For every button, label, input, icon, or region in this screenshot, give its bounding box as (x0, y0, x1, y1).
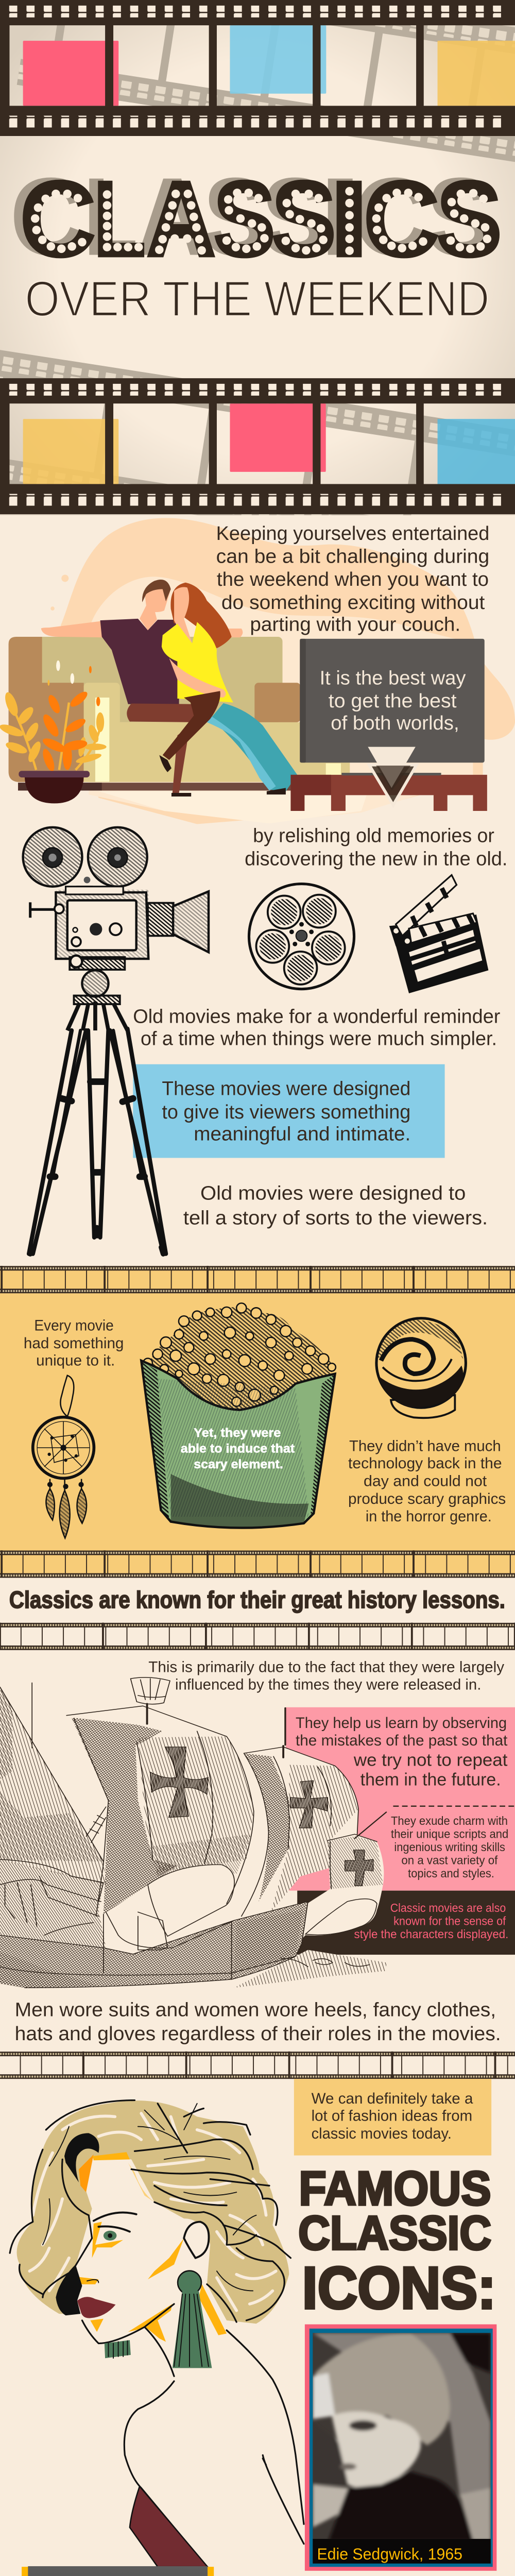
title: CLASSICS: A (146, 159, 216, 279)
text: style (354, 1901, 508, 1941)
hair cream streaks (29, 2113, 276, 2311)
top film strip (0, 0, 515, 136)
panel: famous icons (10, 2079, 496, 2571)
text: learn: the mistakes of the past so that (296, 1732, 507, 1749)
face line (82, 2304, 304, 2567)
text: learn: we try not to repeat (353, 1750, 508, 1770)
text: TV caption: of both worlds, (331, 712, 459, 734)
text: every movie: unique to it. (36, 1352, 115, 1369)
title shadow: A (138, 157, 207, 277)
man and woman (41, 580, 297, 796)
film strip divider (0, 1551, 515, 1578)
text: technology: technology back in the (348, 1455, 502, 1472)
title: CLASSICS: I (329, 159, 370, 279)
text: designed: to give its viewers something (162, 1101, 410, 1123)
tripod legs (29, 1029, 166, 1254)
main sail light hatching (138, 1736, 254, 1872)
text: every movie: Every movie (34, 1317, 114, 1334)
left sail hatching (0, 1687, 106, 1885)
text: fashion ideas: We can definitely take a (312, 2090, 473, 2107)
text: story: tell a story of sorts to the viewers. (183, 1207, 488, 1229)
ship outlines (0, 1677, 386, 1988)
third sail belly (305, 1899, 377, 1935)
icon: clapperboard (389, 875, 488, 993)
text: style: known for the sense of (393, 1914, 506, 1928)
title shadow: S (204, 157, 267, 277)
text: style: style the characters displayed. (354, 1927, 508, 1941)
text: intro: can be a bit challenging during (216, 545, 489, 567)
panel: blue callout and story text (133, 1028, 497, 1229)
text: simpler: of a time when things were much simpler. (141, 1028, 497, 1050)
text: relishing: by relishing old memories or (253, 825, 494, 847)
text: designed (162, 1078, 410, 1145)
plant (0, 574, 107, 803)
photo card: Edie Sedgwick: Edie Sedgwick, 1965 (317, 2545, 462, 2563)
peach blob (61, 518, 515, 824)
text: designed: These movies were designed (162, 1078, 410, 1100)
text: TV caption: It is the best way (320, 667, 466, 689)
title shadow (11, 157, 493, 277)
text: fashion ideas: lot of fashion ideas from (312, 2108, 472, 2125)
vignette background (0, 0, 515, 515)
text: learn: them in the future. (360, 1770, 501, 1790)
photo card: Jane Birkin (22, 2566, 214, 2576)
title: CLASSICS (20, 159, 502, 279)
hair fill (17, 2100, 289, 2324)
text: intro: do something exciting without (221, 591, 485, 614)
hair lines (10, 2100, 304, 2567)
text: intro: the weekend when you want to (217, 568, 489, 590)
panel: photo cards (22, 2566, 214, 2576)
text: intro (216, 522, 489, 636)
text: primarily: influenced by the times they were released in. (175, 1676, 481, 1693)
heading: famous classic icons: CLASSIC (298, 2206, 491, 2260)
text: men wore (15, 1998, 501, 2045)
text: primarily (148, 1659, 504, 1693)
text: charm: their unique scripts and (391, 1827, 508, 1841)
text: learn (296, 1715, 508, 1790)
text: charm: on a vast variety of (401, 1854, 498, 1867)
pink box (286, 1707, 515, 1891)
hull dark corner (0, 1910, 303, 1988)
main sail dark hatching (72, 1718, 177, 1914)
heading: famous classic icons: FAMOUS (299, 2161, 491, 2215)
text: charm: topics and styles. (408, 1867, 494, 1880)
camera body (30, 887, 209, 1004)
text: charm: ingenious writing skills (394, 1840, 505, 1854)
sofa (9, 637, 350, 790)
title shadow: I (320, 157, 361, 277)
lips (77, 2297, 116, 2318)
text: technology (348, 1437, 506, 1525)
icon: vintage movie camera on tripod (23, 827, 209, 1254)
text: charm (391, 1814, 508, 1880)
tilted background film strip lower (0, 350, 446, 515)
light blob (89, 577, 473, 822)
text: charm: They exude charm with (391, 1814, 508, 1827)
text: yet they were: Yet, they were (194, 1426, 281, 1439)
film strip divider (0, 1623, 515, 1650)
dark box (297, 1891, 515, 1955)
text: intro: Keeping yourselves entertained (216, 522, 489, 545)
TV side (300, 639, 306, 762)
panel: header (0, 0, 515, 567)
text: yet they were: able to induce that (181, 1442, 295, 1455)
text: relishing (245, 825, 507, 870)
text: story (183, 1182, 488, 1229)
film strip divider (0, 2052, 515, 2079)
bottom film strip (0, 378, 515, 514)
icon: sailing ship (0, 1677, 386, 1988)
main sail lower hatching (148, 1834, 251, 1876)
title: CLASSICS: S (436, 159, 502, 279)
yellow box (294, 2079, 491, 2156)
title shadow: S (427, 157, 493, 277)
heading: famous classic icons (298, 2161, 496, 2321)
text: every movie: had something (24, 1335, 124, 1352)
reels (23, 827, 147, 891)
text: yet they were (181, 1426, 295, 1471)
blue box (133, 1064, 445, 1158)
second sail hatching (244, 1753, 289, 1902)
illustration: blonde woman (10, 2100, 304, 2567)
bottom glow (98, 791, 368, 823)
eye (104, 2231, 116, 2241)
icon: dream catcher (33, 1376, 94, 1538)
tripod top (67, 1002, 127, 1030)
second sail light hatching (271, 1765, 358, 1912)
cross emblems (150, 1747, 373, 1886)
title shadow: C (354, 157, 431, 277)
text: technology: day and could not (364, 1473, 487, 1490)
text: TV caption: to get the best (329, 690, 457, 712)
TV screen (300, 639, 485, 762)
panel: couple on couch (0, 518, 515, 1027)
title: CLASSICS: L (93, 159, 146, 279)
ship base fills (0, 1679, 386, 1988)
waves hatching (234, 1950, 386, 1988)
text: relishing: discovering the new in the old. (245, 848, 507, 870)
hair dark shapes (56, 2133, 99, 2315)
third sail hatching (328, 1836, 383, 1889)
tilted background film strip upper (16, 25, 515, 162)
yellow shading (71, 2152, 227, 2342)
marquee bulbs (31, 187, 491, 255)
text: designed: meaningful and intimate. (194, 1123, 410, 1145)
panel: history lessons (0, 1551, 515, 2079)
icon: crystal ball (376, 1318, 466, 1418)
text: TV caption (320, 667, 466, 734)
title shadow: S (263, 157, 328, 277)
table (290, 773, 487, 811)
text: men wore: hats and gloves regardless of their roles in the movies. (15, 2023, 501, 2045)
text: learn: They help us learn by observing (296, 1715, 507, 1732)
panel: yellow popcorn section (0, 1266, 515, 1553)
text: technology: produce scary graphics (348, 1490, 506, 1507)
text: intro: parting with your couch. (250, 614, 460, 636)
title: CLASSICS: C (20, 159, 96, 279)
icon: film reel (249, 884, 354, 989)
text: technology: They didn’t have much (349, 1437, 501, 1454)
stern hatching (0, 1859, 106, 1948)
text: fashion ideas (312, 2090, 473, 2142)
dashed divider (393, 1805, 515, 1807)
title: CLASSICS: S (213, 159, 276, 279)
arrow triangles (368, 747, 417, 805)
text: style: Classic movies are also (390, 1901, 506, 1914)
earring (105, 2271, 212, 2368)
photo card: Edie Sedgwick (305, 2325, 496, 2571)
film strip divider (0, 1266, 515, 1293)
title: CLASSICS: S (271, 159, 336, 279)
yellow background (0, 1293, 515, 1553)
text: technology: in the horror genre. (366, 1508, 492, 1525)
title shadow: C (11, 157, 87, 277)
heading: famous classic icons: ICONS: (302, 2255, 496, 2321)
colour squares bottom (23, 403, 515, 484)
text: story: Old movies were designed to (200, 1182, 466, 1204)
text: men wore: Men wore suits and women wore heels, fancy clothes, (15, 1998, 496, 2021)
main sail belly (148, 1865, 234, 1936)
hull hatching (0, 1902, 308, 1988)
colour squares top (23, 25, 515, 106)
title: CLASSICS: C (363, 159, 439, 279)
text: every movie (24, 1317, 124, 1369)
left sail lower hatching (0, 1687, 104, 1861)
title shadow: L (84, 157, 137, 277)
text: fashion ideas: classic movies today. (312, 2125, 452, 2142)
text: primarily: This is primarily due to the fact that they were largely (148, 1659, 504, 1676)
dress (130, 2486, 208, 2567)
icon: popcorn box (141, 1303, 336, 1528)
ear (184, 2222, 209, 2258)
text: yet they were: scary element. (194, 1458, 283, 1471)
text: old movies reminder: Old movies make for a wonderful reminder (133, 1005, 501, 1027)
